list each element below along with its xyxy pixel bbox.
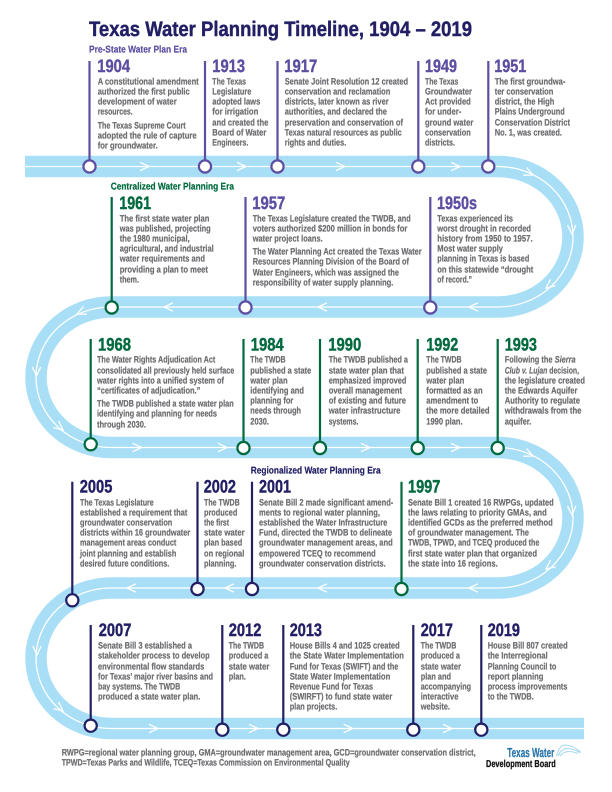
description: House Bills 4 and 1025 created — [290, 641, 400, 651]
description: conservation and reclamation — [285, 87, 391, 97]
logo: Texas Water Development Board — [486, 745, 581, 770]
description: Club v. Lujan decision, — [505, 365, 579, 375]
year: 2007 — [99, 620, 131, 640]
description: Fund, directed the TWDB to delineate — [259, 528, 392, 538]
marker — [85, 625, 97, 732]
description: Water Engineers, which was assigned the — [253, 267, 399, 277]
event: 2012 — [216, 620, 270, 736]
description: voters authorized $200 million in bonds for — [253, 223, 408, 233]
description — [98, 641, 213, 702]
description: groundwater management areas, and — [259, 538, 393, 548]
description: development of water — [98, 97, 177, 107]
year: 1917 — [284, 56, 317, 76]
description: TWDB, TPWD, and TCEQ produced the — [408, 538, 539, 548]
description: the state into 16 regions. — [408, 559, 498, 569]
marker — [395, 482, 408, 595]
description: The TWDB — [229, 641, 264, 651]
title: Texas Water Planning Timeline, 1904 – 2019 — [89, 18, 472, 41]
description: the Interregional — [488, 651, 548, 661]
description: water rights into a unified system of — [96, 375, 225, 385]
year: 2017 — [421, 620, 453, 640]
marker — [106, 197, 118, 314]
description: process improvements — [488, 681, 567, 691]
marker — [237, 339, 250, 454]
description: produced a — [421, 651, 461, 661]
description: The TWDB — [204, 498, 240, 508]
description — [290, 641, 404, 712]
description: adopted the rule of capture — [98, 131, 197, 141]
description: state water — [204, 528, 245, 538]
description: rights and duties. — [285, 137, 346, 147]
description: Board of Water — [212, 127, 267, 137]
description: on regional — [204, 549, 244, 559]
description: Authority to regulate — [505, 395, 580, 405]
description: The Texas — [425, 77, 458, 87]
event: 1949 — [412, 56, 474, 173]
year: 2005 — [80, 477, 112, 497]
description: planning for — [250, 395, 294, 405]
description: Following the Sierra — [505, 355, 576, 365]
description: water project loans. — [252, 233, 323, 243]
description: 1990 plan. — [426, 416, 463, 426]
description: The TWDB — [421, 641, 457, 651]
description: Senate Bill 3 established a — [98, 641, 193, 651]
logo: Texas Water Development Board: Development Board — [486, 759, 556, 770]
description — [249, 355, 311, 426]
description: published a state — [426, 365, 487, 375]
description: Groundwater — [425, 87, 472, 97]
description: Texas experienced its — [437, 213, 513, 223]
description — [425, 77, 474, 147]
year: 2013 — [290, 620, 322, 640]
description: environmental flow standards — [98, 661, 204, 671]
description: of record.” — [437, 274, 472, 284]
description: established a requirement that — [80, 508, 187, 518]
description: plan and — [421, 671, 451, 681]
era heading: pre-state: Pre-State Water Plan Era — [89, 45, 187, 56]
description: The Water Planning Act created the Texas Water — [253, 246, 422, 256]
description: House Bill 807 created — [488, 641, 568, 651]
description: of groundwater management. The — [408, 528, 529, 538]
description: plan projects. — [290, 702, 337, 712]
description: withdrawals from the — [504, 406, 581, 416]
description: water plan — [249, 375, 288, 385]
marker — [191, 482, 204, 595]
description: the more detailed — [426, 406, 490, 416]
marker — [239, 197, 252, 314]
marker — [314, 339, 326, 454]
description — [259, 498, 393, 569]
description: The TWDB — [250, 355, 286, 365]
description — [212, 77, 268, 147]
footnote: abbreviations: TPWD=Texas Parks and Wildlife, TCEQ=Texas Commission on Environmental Quality — [62, 758, 350, 768]
description: formatted as an — [426, 385, 483, 395]
description: of existing and future — [329, 395, 406, 405]
description: Texas natural resources as public — [285, 127, 402, 137]
description: Senate Bill 1 created 16 RWPGs, updated — [408, 498, 554, 508]
year: 1949 — [425, 56, 457, 76]
description: groundwater conservation — [80, 518, 173, 528]
marker — [216, 625, 228, 736]
description: The TWDB published a — [329, 355, 409, 365]
event: 2001 — [246, 477, 393, 595]
marker — [492, 339, 504, 454]
year: 1968 — [98, 335, 131, 355]
era heading: centralized: Centralized Water Planning Era — [111, 182, 234, 193]
era heading: regionalized: Regionalized Water Planning Era — [251, 466, 381, 477]
description: published a state — [250, 365, 311, 375]
description: 2030. — [250, 416, 269, 426]
event: 2017 — [407, 620, 471, 736]
description: districts, later known as river — [285, 97, 389, 107]
description: groundwater conservation districts. — [259, 559, 386, 569]
year: 1950s — [437, 193, 477, 213]
description: preservation and conservation of — [285, 117, 404, 127]
description: Senate Joint Resolution 12 created — [285, 77, 408, 87]
year: 1984 — [251, 335, 284, 355]
description: was published, projecting — [119, 223, 211, 233]
description: needs through — [250, 406, 301, 416]
event: 2005 — [66, 477, 191, 606]
description: Most water supply — [437, 243, 504, 253]
description: through 2030. — [97, 419, 146, 429]
description: the laws relating to priority GMAs, and — [408, 508, 547, 518]
description: first state water plan that organized — [408, 549, 537, 559]
description: systems. — [329, 416, 358, 426]
description: districts within 16 groundwater — [80, 528, 191, 538]
description: The TWDB — [426, 355, 462, 365]
footnote: abbreviations — [62, 748, 476, 768]
description: districts. — [425, 137, 455, 147]
description: The Texas Legislature created the TWDB, and — [253, 213, 411, 223]
year: 1961 — [119, 193, 151, 213]
flow arrows — [32, 162, 576, 733]
description — [436, 213, 533, 284]
marker — [271, 61, 284, 173]
description: The first state water plan — [120, 213, 210, 223]
description: empowered TCEQ to recommend — [259, 549, 376, 559]
description: Senate Bill 2 made significant amend- — [259, 498, 393, 508]
year: 1951 — [494, 56, 526, 76]
description: Resources Planning Division of the Board of — [253, 256, 410, 266]
description: planning. — [204, 559, 236, 569]
description: identifying and planning for needs — [97, 409, 217, 419]
description: produced a state water plan. — [98, 692, 200, 702]
marker — [246, 482, 258, 595]
description: worst drought in recorded — [436, 223, 531, 233]
marker — [412, 339, 424, 454]
marker — [199, 61, 211, 173]
event: 1950s — [424, 193, 533, 314]
event: 1984 — [237, 335, 311, 454]
year: 2012 — [229, 620, 261, 640]
description: The Texas — [212, 77, 246, 87]
description: emphasized improved — [329, 375, 407, 385]
description — [98, 77, 199, 151]
description: responsibility of water supply planning. — [253, 277, 393, 287]
year: 2019 — [488, 620, 520, 640]
description: State Water Implementation — [290, 671, 391, 681]
event: 2007 — [85, 620, 213, 732]
event: 1997 — [395, 477, 554, 595]
description: The Texas Supreme Court — [98, 121, 186, 131]
description: state water — [229, 661, 270, 671]
description: accompanying — [421, 681, 471, 691]
marker — [407, 625, 419, 736]
description: stakeholder process to develop — [98, 651, 210, 661]
event: 2019 — [475, 620, 568, 736]
description: Planning Council to — [488, 661, 557, 671]
description: state water — [421, 661, 461, 671]
description — [204, 498, 245, 569]
description: history from 1950 to 1957. — [437, 233, 533, 243]
marker — [475, 625, 487, 736]
description: for under- — [425, 107, 461, 117]
description: on this statewide “drought — [437, 264, 533, 274]
description: district, the High — [495, 97, 555, 107]
description: providing a plan to meet — [120, 264, 208, 274]
description: Revenue Fund for Texas — [290, 681, 373, 691]
description: overall management — [329, 385, 402, 395]
description: the State Water Implementation — [290, 651, 404, 661]
event: 1917 — [271, 56, 408, 173]
description: amendment to — [426, 395, 479, 405]
description — [252, 213, 422, 287]
description — [504, 355, 585, 426]
description: identified GCDs as the preferred method — [408, 518, 553, 528]
year: 1992 — [426, 335, 458, 355]
footnote: abbreviations: RWPG=regional water planning group, GMA=groundwater management area, GCD=groundwater conservation district, — [62, 748, 476, 758]
description: report planning — [488, 671, 544, 681]
event: 1990 — [314, 335, 409, 454]
description: state water plan that — [329, 365, 404, 375]
event: 1992 — [412, 335, 490, 454]
description: and created the — [212, 117, 268, 127]
description: for irrigation — [212, 107, 259, 117]
description — [488, 641, 568, 702]
marker — [85, 339, 97, 450]
description: them. — [120, 274, 139, 284]
description: produced a — [229, 651, 269, 661]
description: The Texas Legislature — [80, 498, 154, 508]
description: The TWDB published a state water plan — [97, 398, 234, 408]
description — [495, 77, 570, 137]
description: established the Water Infrastructure — [259, 518, 387, 528]
description — [79, 498, 191, 569]
description: produced — [204, 508, 238, 518]
description: No. 1, was created. — [495, 127, 562, 137]
description: water plan — [425, 375, 465, 385]
description: The Water Rights Adjudication Act — [97, 355, 215, 365]
event: 2002 — [191, 477, 245, 595]
description: ground water — [425, 117, 474, 127]
description: Plains Underground — [495, 107, 565, 117]
description: A constitutional amendment — [98, 77, 199, 87]
event: 1904 — [83, 56, 199, 173]
description: “certificates of adjudication.” — [97, 385, 200, 395]
description: aquifer. — [505, 416, 531, 426]
description: Act provided — [425, 97, 471, 107]
event: 1957 — [239, 193, 422, 314]
description: plan. — [229, 671, 246, 681]
description: water requirements and — [119, 253, 205, 263]
description: the 1980 municipal, — [120, 233, 190, 243]
description: for groundwater. — [98, 141, 158, 151]
description: (SWIRFT) to fund state water — [290, 692, 393, 702]
description: identifying and — [250, 385, 304, 395]
year: 2002 — [204, 477, 236, 497]
year: 1957 — [252, 193, 285, 213]
timeline river band — [25, 166, 584, 728]
description: adopted laws — [212, 97, 260, 107]
marker — [424, 197, 436, 314]
event: 1913 — [199, 56, 268, 173]
description: Conservation District — [495, 117, 570, 127]
event: 1993 — [492, 335, 585, 454]
description: Engineers. — [212, 137, 248, 147]
marker — [277, 625, 289, 736]
description: the legislature created — [505, 375, 585, 385]
description — [229, 641, 270, 681]
year: 1993 — [505, 335, 537, 355]
description: authorities, and declared the — [285, 107, 387, 117]
description — [96, 355, 234, 429]
description: joint planning and establish — [79, 549, 177, 559]
description: bay systems. The TWDB — [98, 681, 181, 691]
description: ter conservation — [495, 87, 554, 97]
description: ments to regional water planning, — [259, 508, 380, 518]
description — [425, 355, 490, 426]
year: 1904 — [97, 56, 130, 76]
description — [328, 355, 409, 426]
description: planning in Texas is based — [437, 253, 530, 263]
description — [285, 77, 408, 147]
description: interactive — [421, 692, 458, 702]
event: 1951 — [482, 56, 570, 173]
year: 1997 — [408, 477, 440, 497]
description: agricultural, and industrial — [120, 243, 214, 253]
description: desired future conditions. — [80, 559, 169, 569]
marker — [412, 61, 424, 173]
description: the Edwards Aquifer — [505, 385, 578, 395]
description: The first groundwa- — [495, 77, 565, 87]
description: consolidated all previously held surface — [97, 365, 234, 375]
description: website. — [420, 702, 450, 712]
logo: Texas Water Development Board: Texas Water — [507, 745, 554, 760]
year: 1990 — [328, 335, 361, 355]
year: 2001 — [259, 477, 291, 497]
description — [119, 213, 214, 284]
marker — [482, 61, 494, 173]
description: to the TWDB. — [488, 692, 534, 702]
description — [408, 498, 554, 569]
description: authorized the first public — [98, 87, 190, 97]
description: water infrastructure — [328, 406, 400, 416]
description: Fund for Texas (SWIFT) and the — [290, 661, 398, 671]
description: the first — [204, 518, 229, 528]
icon: water spray — [556, 745, 581, 756]
event: 1968 — [85, 335, 234, 450]
description: resources. — [98, 107, 133, 117]
event: 2013 — [277, 620, 404, 736]
marker — [83, 61, 96, 173]
description: Legislature — [212, 87, 251, 97]
description: plan based — [204, 538, 243, 548]
description: conservation — [425, 127, 471, 137]
description — [420, 641, 471, 712]
description: for Texas’ major river basins and — [98, 671, 213, 681]
description: management areas conduct — [80, 538, 176, 548]
year: 1913 — [212, 56, 245, 76]
event: 1961 — [106, 193, 214, 314]
marker — [66, 482, 78, 606]
